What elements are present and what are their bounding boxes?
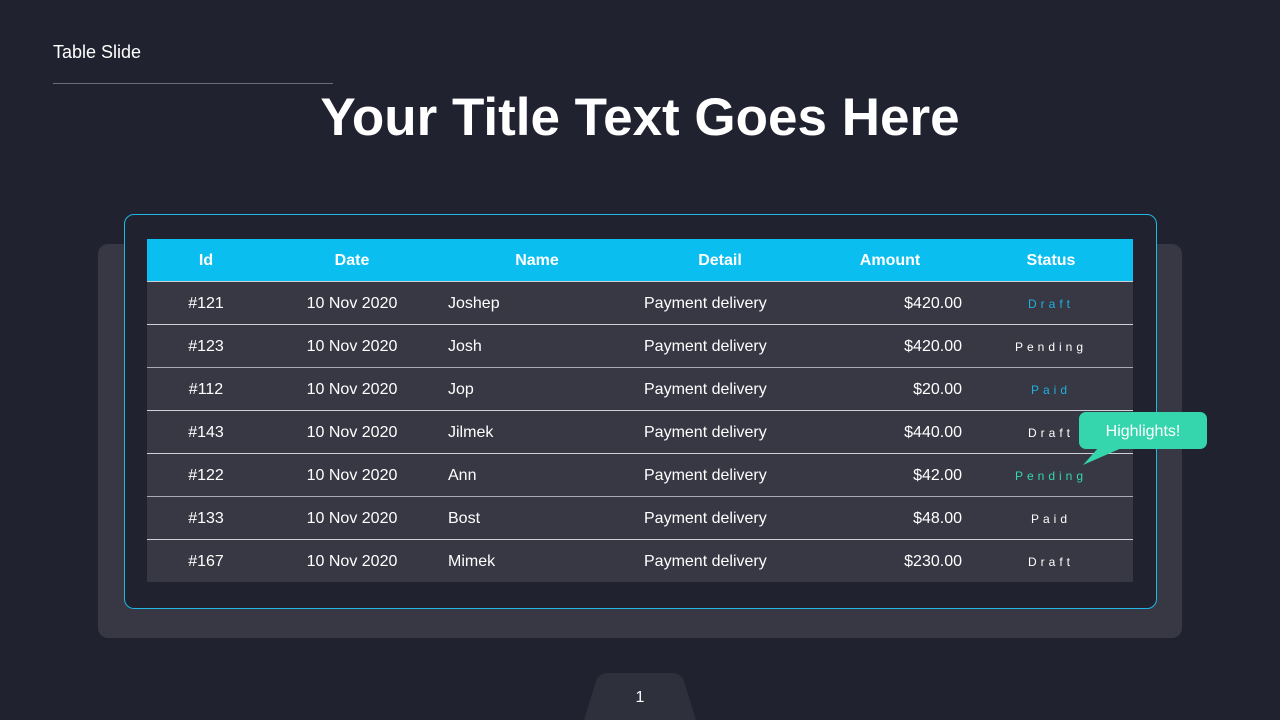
table: Paid	[1031, 512, 1071, 526]
table: $48.00	[913, 510, 962, 527]
callout: highlights	[1079, 412, 1207, 465]
table: Jilmek	[448, 424, 493, 441]
table: $440.00	[904, 424, 962, 441]
table: Payment delivery	[644, 467, 767, 484]
table: Jop	[448, 381, 474, 398]
table: Payment delivery	[644, 295, 767, 312]
table: Payment delivery	[644, 510, 767, 527]
table frame	[124, 214, 1157, 609]
table: Paid	[1031, 383, 1071, 397]
table: $42.00	[913, 467, 962, 484]
table: #121	[188, 295, 224, 312]
table: Payment delivery	[644, 338, 767, 355]
table: #122	[188, 467, 224, 484]
header row	[147, 239, 1133, 281]
subtitle: Table Slide	[53, 42, 141, 62]
table: Bost	[448, 510, 480, 527]
header row: Detail	[698, 252, 742, 269]
header row: Name	[515, 252, 559, 269]
table: Draft	[1028, 297, 1074, 311]
table: #143	[188, 424, 224, 441]
header row: Amount	[860, 252, 920, 269]
table: $420.00	[904, 295, 962, 312]
table: #133	[188, 510, 224, 527]
table: 10 Nov 2020	[307, 510, 397, 527]
table: Payment delivery	[644, 553, 767, 570]
table: #123	[188, 338, 224, 355]
table: $420.00	[904, 338, 962, 355]
table: 10 Nov 2020	[307, 424, 397, 441]
table: Joshep	[448, 295, 500, 312]
table: #112	[189, 381, 223, 398]
table: 10 Nov 2020	[307, 295, 397, 312]
page number tab	[584, 673, 696, 720]
table: Draft	[1028, 555, 1074, 569]
header row: Status	[1027, 252, 1075, 269]
table: 10 Nov 2020	[307, 381, 397, 398]
table: Draft	[1028, 426, 1074, 440]
table: Pending	[1015, 469, 1087, 483]
table: Payment delivery	[644, 424, 767, 441]
header row: Date	[335, 252, 369, 269]
table: $20.00	[913, 381, 962, 398]
page number tab: 1	[636, 689, 644, 706]
table: Mimek	[448, 553, 495, 570]
table: 10 Nov 2020	[307, 467, 397, 484]
table: 10 Nov 2020	[307, 553, 397, 570]
callout: highlights: Highlights!	[1106, 423, 1180, 440]
table: Ann	[448, 467, 476, 484]
header row: Id	[199, 252, 213, 269]
back panel	[98, 244, 1182, 638]
table: Josh	[448, 338, 482, 355]
table: 10 Nov 2020	[307, 338, 397, 355]
table: Pending	[1015, 340, 1087, 354]
table: Payment delivery	[644, 381, 767, 398]
title: Your Title Text Goes Here	[320, 88, 960, 147]
table	[147, 239, 1133, 582]
table: #167	[188, 553, 224, 570]
table: $230.00	[904, 553, 962, 570]
